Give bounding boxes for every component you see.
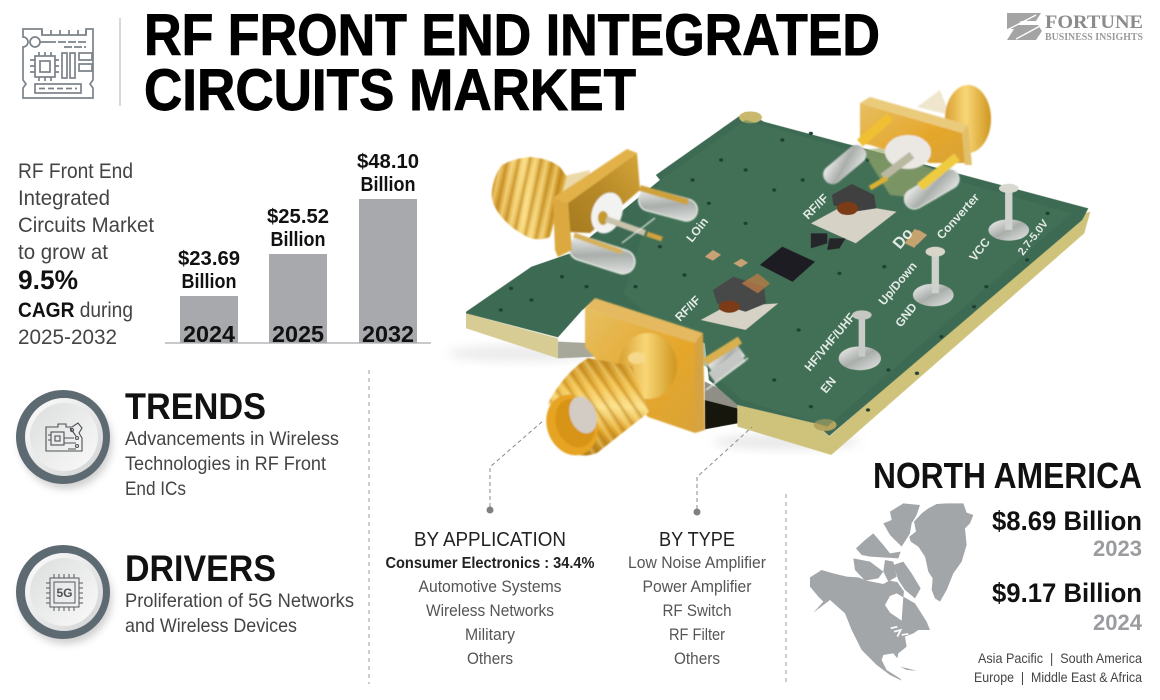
value: 2023 market size: $8.69 Billion [992, 506, 1142, 536]
title [144, 3, 880, 123]
panel: by application: Others [467, 649, 513, 668]
bar 2032: Billion [360, 174, 416, 196]
bar chart: market size [165, 151, 431, 347]
text: market growth summary: 2025-2032 [18, 326, 117, 349]
bar 2025: Billion [270, 229, 326, 251]
bottom connector [538, 298, 748, 463]
transformers and chip [701, 184, 927, 330]
panel: by type: Others [674, 649, 720, 668]
panel: by application [386, 529, 594, 668]
text: market growth summary: RF Front End [18, 160, 133, 183]
bar 2024: 2024 [183, 321, 235, 347]
text: trends description [125, 428, 339, 500]
icon: circuit board header icon [23, 29, 93, 98]
bar 2024 [178, 248, 240, 347]
text: drivers description: Proliferation of 5G Networks [125, 590, 354, 612]
board silkscreen labels: HF/VHF/UHF [802, 310, 858, 374]
top right connector [819, 85, 991, 213]
bar 2032 [357, 151, 419, 347]
text: market growth summary: to grow at [18, 241, 108, 264]
panel: by application: Military [465, 625, 515, 644]
panel: by application: Automotive Systems [418, 577, 562, 596]
bar 2025: 2025 [272, 321, 324, 347]
title: RF FRONT END INTEGRATED [144, 3, 880, 68]
text: other regions: Europe | Middle East & Africa [974, 669, 1142, 685]
board silkscreen labels: GND [892, 300, 920, 330]
map: North America and Greenland [810, 503, 973, 681]
panel: by application: BY APPLICATION [414, 529, 566, 551]
value: 2023 market size: 2023 [1093, 536, 1142, 561]
logo: Fortune Business Insights: BUSINESS INSIGHTS [1045, 32, 1143, 43]
text: trends description: Technologies in RF Front [125, 453, 327, 475]
arrow: type leader line [694, 427, 752, 516]
board silkscreen labels: RF/IF [672, 293, 703, 324]
panel: by type: Low Noise Amplifier [628, 553, 766, 572]
photo: RF circuit board with gold connectors [448, 85, 1090, 463]
left connector [492, 149, 700, 277]
value: 2023 market size [992, 506, 1142, 561]
logo: Fortune Business Insights [1007, 12, 1143, 43]
icon: 5G chip button: 5G [56, 586, 73, 600]
panel: by type: Power Amplifier [642, 577, 752, 596]
panel: by type [628, 529, 766, 668]
text: trends description: Advancements in Wireless [125, 428, 339, 450]
panel: by application: Consumer Electronics : 34.4% [386, 555, 594, 572]
panel: regional statistics [873, 455, 1143, 685]
panel: by type: RF Filter [669, 625, 725, 644]
board silkscreen labels: RF/IF [800, 191, 831, 222]
panel: by application: Wireless Networks [426, 601, 554, 620]
text: trends description: End ICs [125, 478, 186, 500]
bar 2024: Billion [182, 271, 236, 293]
board silkscreen labels: EN [818, 374, 839, 396]
panel: trends [16, 386, 339, 500]
text: market growth summary: CAGR during [18, 299, 133, 322]
board silkscreen labels: Do [890, 225, 917, 253]
icon: circuit button [16, 390, 112, 489]
board silkscreen labels [672, 190, 1051, 396]
board silkscreen labels: 2.7-5.0V [1016, 217, 1051, 258]
text: drivers description [125, 590, 354, 637]
board silkscreen labels: VCC [966, 235, 993, 264]
title: CIRCUITS MARKET [144, 58, 636, 123]
bar 2025 [267, 206, 329, 347]
bar 2025: $25.52 [267, 206, 329, 228]
icon: 5G chip button [16, 545, 112, 644]
posts [839, 184, 1029, 370]
text: drivers description: and Wireless Devices [125, 615, 297, 637]
text: other regions: Asia Pacific | South America [978, 650, 1142, 666]
bar 2032: $48.10 [357, 151, 419, 173]
heading: trends: TRENDS [125, 386, 266, 427]
logo: Fortune Business Insights: FORTUNE [1045, 12, 1143, 33]
text: other regions [974, 650, 1142, 685]
arrow: application leader line [486, 420, 544, 514]
board silkscreen labels: Up/Down [876, 259, 920, 308]
board silkscreen labels: LOin [683, 215, 711, 245]
text: market growth summary: Integrated [18, 187, 110, 210]
bar 2024: $23.69 [178, 248, 240, 270]
heading: drivers: DRIVERS [125, 548, 276, 589]
text: market growth summary: 9.5% [18, 265, 78, 295]
text: market growth summary: Circuits Market [18, 214, 154, 237]
bar 2032: 2032 [362, 321, 414, 347]
panel: by type: BY TYPE [659, 529, 735, 551]
value: 2024 market size [992, 578, 1143, 635]
panel: drivers [16, 545, 354, 644]
panel: by type: RF Switch [662, 601, 732, 620]
text: market growth summary [18, 160, 154, 349]
board silkscreen labels: Converter [934, 190, 982, 242]
value: 2024 market size: 2024 [1093, 610, 1143, 635]
value: 2024 market size: $9.17 Billion [992, 578, 1142, 608]
